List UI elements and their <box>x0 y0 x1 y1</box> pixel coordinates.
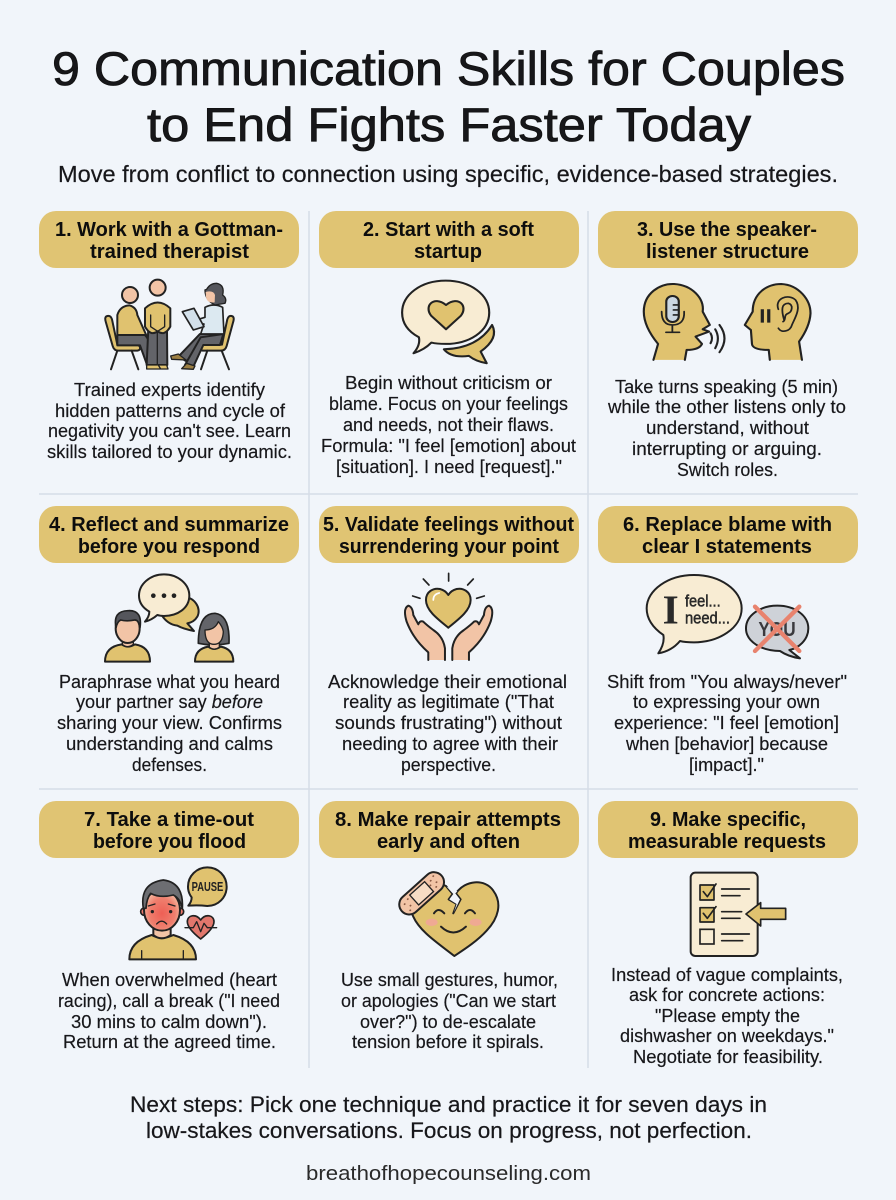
icon: two people talking <box>105 574 233 662</box>
panel: skill 3 <box>598 211 858 480</box>
panel: skill 7 <box>39 801 299 1052</box>
heading: skill 9 <box>598 801 858 858</box>
body text: skill 9 <box>611 965 843 1067</box>
heading: skill 3: listener structure <box>646 240 809 263</box>
icon: I statement replaces you: need... <box>685 608 730 627</box>
heading: skill 4: before you respond <box>78 535 260 558</box>
body text: skill 1 <box>47 380 292 462</box>
body text: skill 5: Acknowledge their emotional <box>328 672 567 692</box>
body text: skill 5: needing to agree with their <box>342 734 558 754</box>
heading: skill 8: 8. Make repair attempts <box>335 808 561 831</box>
body text: skill 1: negativity you can't see. Learn <box>48 421 291 441</box>
body text: skill 6: to expressing your own <box>633 692 820 712</box>
body text: skill 6: Shift from "You always/never" <box>607 672 847 692</box>
heading: skill 6: 6. Replace blame with <box>623 513 832 536</box>
icon: speech bubbles with heart <box>402 281 494 363</box>
heading: skill 2: startup <box>414 240 482 263</box>
title: to End Fights Faster Today <box>147 98 752 151</box>
panel: skill 5 <box>319 506 579 775</box>
icon: I statement replaces you: I <box>663 586 679 632</box>
body text: skill 2 <box>321 373 576 477</box>
body text: skill 9: Negotiate for feasibility. <box>633 1047 823 1067</box>
body text: skill 9: Instead of vague complaints, <box>611 965 843 985</box>
icon: I statement replaces you: feel... <box>685 592 721 611</box>
body text: skill 1: skills tailored to your dynamic. <box>47 442 292 462</box>
heading: skill 5: 5. Validate feelings without <box>323 513 574 536</box>
heading: skill 6: clear I statements <box>642 535 812 558</box>
body text: skill 7: Return at the agreed time. <box>63 1032 276 1052</box>
body text: skill 8 <box>341 970 558 1052</box>
body text: skill 3: Switch roles. <box>677 460 778 480</box>
panel: skill 1 <box>39 211 299 462</box>
body text: skill 4: defenses. <box>132 755 207 775</box>
next steps text: Next steps: Pick one technique and practice it for seven days in <box>130 1092 767 1117</box>
icon: checklist with arrow <box>691 873 786 956</box>
heading: skill 5 <box>319 506 579 563</box>
body text: skill 5: perspective. <box>401 755 496 775</box>
heading: skill 5: surrendering your point <box>339 535 559 558</box>
icon: speaker and listener heads <box>644 284 811 360</box>
body text: skill 9: "Please empty the <box>655 1006 800 1026</box>
body text: skill 6: [impact]." <box>689 755 764 775</box>
body text: skill 4: Paraphrase what you heard <box>59 672 280 692</box>
heading: skill 1: 1. Work with a Gottman- <box>55 218 283 241</box>
heading: skill 2: 2. Start with a soft <box>363 218 534 241</box>
heading: skill 2 <box>319 211 579 268</box>
title <box>52 42 845 151</box>
heading: skill 7: 7. Take a time-out <box>84 808 254 831</box>
body text: skill 3: while the other listens only to <box>607 397 846 417</box>
body text: skill 7: racing), call a break ("I need <box>58 991 280 1011</box>
heading: skill 6 <box>598 506 858 563</box>
body text: skill 3: understand, without <box>646 418 809 438</box>
heading: skill 1: trained therapist <box>90 240 249 263</box>
body text: skill 3 <box>607 377 846 480</box>
body text: skill 8: Use small gestures, humor, <box>341 970 558 990</box>
body text: skill 2: blame. Focus on your feelings <box>329 394 568 414</box>
body text: skill 4: understanding and calms <box>66 734 273 754</box>
body text: skill 6: when [behavior] because <box>625 734 828 754</box>
body text: skill 3: Take turns speaking (5 min) <box>615 377 838 397</box>
website: breathofhopecounseling.com <box>306 1162 591 1185</box>
body text: skill 5 <box>328 672 567 775</box>
heading: skill 3: 3. Use the speaker- <box>637 218 817 241</box>
panel: skill 2 <box>319 211 579 477</box>
body text: skill 2: and needs, not their flaws. <box>343 415 554 435</box>
title: 9 Communication Skills for Couples <box>52 42 845 95</box>
body text: skill 2: Formula: "I feel [emotion] about <box>321 436 576 456</box>
body text: skill 1: hidden patterns and cycle of <box>55 401 286 421</box>
heading: skill 3 <box>598 211 858 268</box>
body text: skill 4 <box>57 672 282 775</box>
body text: skill 4: sharing your view. Confirms <box>57 713 282 733</box>
body text: skill 2: [situation]. I need [request]." <box>336 457 562 477</box>
heading: skill 4 <box>39 506 299 563</box>
body text: skill 9: ask for concrete actions: <box>629 985 825 1005</box>
heading: skill 1 <box>39 211 299 268</box>
panel: skill 4 <box>39 506 299 775</box>
icon: I statement replaces you <box>647 575 808 658</box>
panel: skill 8 <box>319 801 579 1052</box>
icon: hands holding heart <box>405 573 492 660</box>
body text: skill 7: 30 mins to calm down"). <box>71 1012 267 1032</box>
body text: skill 8: or apologies ("Can we start <box>341 991 556 1011</box>
body text: skill 2: Begin without criticism or <box>345 373 552 393</box>
panel: skill 9 <box>598 801 858 1067</box>
body text: skill 7: When overwhelmed (heart <box>62 970 277 990</box>
body text: skill 5: reality as legitimate ("That <box>343 692 554 712</box>
heading: skill 7: before you flood <box>93 830 246 853</box>
heading: skill 8: early and often <box>377 830 520 853</box>
icon: bandaged smiling heart <box>395 868 498 956</box>
icon: overwhelmed person calling pause: PAUSE <box>192 880 223 894</box>
body text: skill 8: over?") to de-escalate <box>360 1012 536 1032</box>
icon: overwhelmed person calling pause <box>129 867 227 959</box>
heading: skill 9: 9. Make specific, <box>650 808 806 831</box>
body text: skill 9: dishwasher on weekdays." <box>620 1026 834 1046</box>
subtitle: Move from conflict to connection using specific, evidence-based strategies. <box>58 161 838 187</box>
heading: skill 8 <box>319 801 579 858</box>
panel: skill 6 <box>598 506 858 775</box>
body text: skill 8: tension before it spirals. <box>352 1032 544 1052</box>
body text: skill 5: sounds frustrating") without <box>335 713 562 733</box>
body text: skill 3: interrupting or arguing. <box>632 439 822 459</box>
icon: couple with therapist <box>105 280 234 369</box>
next steps text: low-stakes conversations. Focus on progress, not perfection. <box>146 1118 752 1143</box>
body text: skill 6: experience: "I feel [emotion] <box>614 713 839 733</box>
body text: skill 7 <box>58 970 280 1052</box>
body text: skill 4: your partner say before <box>76 692 263 712</box>
heading: skill 7 <box>39 801 299 858</box>
heading: skill 9: measurable requests <box>628 830 826 853</box>
body text: skill 1: Trained experts identify <box>74 380 266 400</box>
next steps text <box>130 1092 767 1143</box>
icon: I statement replaces you: YOU <box>758 619 796 641</box>
body text: skill 6 <box>607 672 847 775</box>
heading: skill 4: 4. Reflect and summarize <box>49 513 289 536</box>
